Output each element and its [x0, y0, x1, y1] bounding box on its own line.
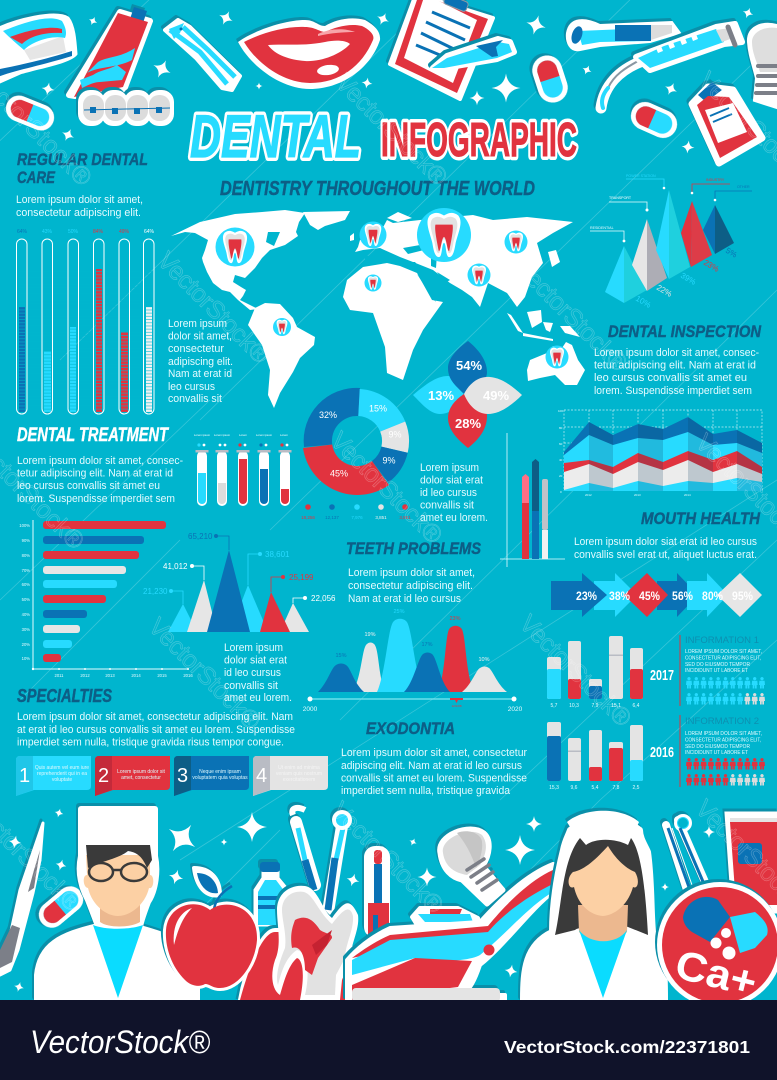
chart: triangles: 22,056: [311, 594, 336, 603]
chart: cylinders 2017: 7,9: [592, 703, 599, 709]
icon: calcium badge: [657, 882, 777, 1008]
panel: information 2: INCIDIDUNT UT LABORE ET: [685, 750, 748, 756]
chart: cylinders 2017: 5,7: [551, 703, 558, 709]
chart: level tubes: 64%: [144, 229, 155, 235]
chart: donut: 32%: [319, 410, 337, 420]
chart: pyramids: OTHER: [737, 185, 750, 189]
chart: donut: 9%: [382, 456, 396, 466]
text block: triangles note: convallis sit: [224, 680, 278, 692]
chart: pyramids: 5%: [724, 246, 739, 260]
chart: bell curves: 25%: [393, 609, 405, 615]
chart: bell curves: 10%: [478, 657, 490, 663]
donut legend: 3,851: [375, 515, 387, 520]
icon: dental implant: [749, 25, 777, 107]
chart: cylinders 2017: [547, 636, 674, 709]
box 3: [174, 756, 249, 796]
text block: exodontia: imperdiet sem nulla, tristique gravida: [341, 785, 511, 797]
heading: REGULAR DENTAL: [17, 150, 148, 169]
text block: exodontia: Lorem ipsum dolor sit amet, consectetur: [341, 747, 527, 759]
icon: clipboard: [390, 0, 493, 99]
text block: dental inspection: [594, 347, 759, 397]
text block: triangles note: amet eu lorem.: [224, 692, 292, 704]
text block: mouth health: convallis svel erat ut, aliquet luctus erat.: [574, 549, 757, 561]
text block: map note: adipiscing elit.: [168, 356, 233, 368]
chart: level tubes: 64%: [17, 229, 28, 235]
chart: arrow percentages: 23%: [576, 589, 597, 603]
chart: pyramids: INDUSTRY: [706, 178, 725, 182]
chart: arrow percentages: 95%: [732, 589, 753, 603]
text block: specialties: Lorem ipsum dolor sit amet, consectetur adipiscing elit. Nam: [17, 711, 293, 723]
heading: dental treatment: DENTAL TREATMENT: [17, 425, 169, 446]
panel: information 2: INFORMATION 2: [685, 716, 759, 727]
title: INFOGRAPHIC: [381, 114, 577, 167]
chart: bell curves: 23%: [449, 616, 461, 622]
panel: information 1: INCIDIDUNT UT LABORE ET: [685, 668, 748, 674]
chart: cylinders 2016: [547, 722, 674, 791]
panel: information 2: LOREM IPSUM DOLOR SIT AMET,: [685, 731, 762, 737]
text block: petals note: id leo cursus: [420, 487, 477, 499]
text block: dental inspection: Lorem ipsum dolor sit amet, consec-: [594, 347, 759, 359]
text block: petals note: convallis sit: [420, 500, 474, 512]
text block: map note: [168, 318, 233, 405]
chart: horizontal bars: 60%: [22, 582, 30, 587]
icon: pen: [432, 39, 514, 68]
chart: triangles: 21,230: [143, 587, 168, 596]
text block: specialties: [17, 711, 295, 748]
chart: layered area: 2012: [585, 493, 592, 497]
chart: horizontal bars: 30%: [22, 627, 30, 632]
text block: mouth health: [574, 536, 757, 561]
icon: forceps: [165, 20, 240, 90]
box 3: voluptatem quia voluptas: [192, 775, 248, 781]
chart: horizontal bars: 20%: [22, 642, 30, 647]
chart: horizontal bars: 50%: [22, 597, 30, 602]
text block: dental treatment: lorem. Suspendisse imperdiet sem: [17, 493, 175, 505]
donut legend: 12,137: [325, 515, 339, 520]
subtitle: DENTISTRY THROUGHOUT THE WORLD: [220, 178, 535, 200]
chart: arrow percentages: 38%: [609, 589, 630, 603]
icon: dental probes: [292, 808, 352, 912]
infographic canvas: VectorStock®: [514, 609, 637, 733]
chart: grouped vertical bars: [500, 433, 565, 567]
box 1: [16, 756, 91, 796]
chart: arrow percentages: 80%: [702, 589, 723, 603]
chart: cylinders 2016: 2016: [650, 744, 674, 761]
icon: dental handpiece: [567, 20, 680, 50]
panel: information 1: LOREM IPSUM DOLOR SIT AMET,: [685, 649, 762, 655]
footer brand logo: VectorStock®: [30, 1024, 210, 1060]
title: DENTAL: [190, 103, 361, 170]
icon: toothbrush: [0, 15, 76, 84]
infographic canvas: VectorStock®: [326, 796, 449, 920]
chart: donut: 15%: [369, 404, 387, 414]
heading: exodontia: EXODONTIA: [366, 719, 455, 738]
box 2: amet, consectetur: [121, 775, 161, 781]
footer image id: VectorStock.com/22371801: [504, 1037, 750, 1057]
infographic canvas: VectorStock®: [143, 612, 266, 736]
text block: specialties: imperdiet sem nulla, tristique gravida risus tempor congue.: [17, 736, 284, 748]
chart: cylinders 2016: 9,6: [571, 785, 578, 791]
icon: capsule: [2, 92, 58, 134]
chart: cylinders 2016: 15,3: [549, 785, 559, 791]
text block: specialties: at erat id leo cursus convallis sit amet eu lorem. Suspendisse: [17, 724, 295, 736]
chart: horizontal bars: 70%: [22, 568, 30, 573]
text block: triangles note: id leo cursus: [224, 667, 281, 679]
panel: regular dental care: [16, 150, 155, 414]
chart: bell curves: 19%: [364, 632, 376, 638]
panel: information 1: INFORMATION 1: [685, 635, 759, 646]
text block: dental inspection: tetur adipiscing elit. Nam at erat id: [594, 360, 756, 372]
panel: information 1: CONSECTETUR ADIPISCING ELIT,: [685, 656, 761, 662]
icon: medicine bottle: [692, 82, 762, 163]
chart: pyramids: POWER STATION: [626, 174, 656, 178]
chart: horizontal bars: 2016: [183, 673, 193, 678]
chart: layered area: [558, 409, 762, 497]
chart: donut: 45%: [330, 468, 348, 478]
chart: level tubes: [16, 229, 155, 414]
text block: dental treatment: tetur adipiscing elit. Nam at erat id: [17, 468, 173, 480]
text block: petals note: [420, 462, 488, 524]
chart: test tubes: Lorem ipsum: [256, 433, 273, 437]
icon: gums and tooth: [240, 886, 358, 1000]
heading: mouth health: MOUTH HEALTH: [641, 509, 761, 528]
chart: triangles: 38,601: [265, 550, 290, 559]
footer bar: [0, 1000, 777, 1080]
chart: horizontal bars: 2013: [105, 673, 115, 678]
text block: [16, 194, 143, 219]
donut legend: 7,976: [351, 515, 363, 520]
map tooth markers: [216, 208, 568, 368]
chart: test tubes: Lorem: [280, 433, 289, 437]
text block: triangles note: [224, 642, 292, 704]
chart: horizontal bars: 90%: [22, 538, 30, 543]
specialties boxes: [16, 756, 328, 796]
icon: apple: [166, 868, 257, 988]
panel: information 2: [680, 715, 765, 787]
text block: map note: dolor sit amet,: [168, 330, 232, 342]
box 4: exercitationem: [283, 777, 315, 783]
icon: capsule: [626, 97, 682, 143]
text block: mouth health: Lorem ipsum dolor siat erat id leo cursus: [574, 536, 757, 548]
box 2: [95, 756, 170, 796]
icon: dental chair: [347, 864, 553, 1002]
chart: cylinders 2017: 15,1: [611, 703, 621, 709]
chart: horizontal bars: 2012: [80, 673, 90, 678]
chart: layered area: 0: [560, 490, 562, 494]
text block: teeth problems: [348, 567, 475, 605]
nurse: [523, 811, 665, 1000]
text block: petals note: dolor siat erat: [420, 474, 483, 486]
text block: dental inspection: lorem. Suspendisse imperdiet sem: [594, 385, 752, 397]
chart: level tubes: 49%: [119, 229, 130, 235]
chart: level tubes: 84%: [93, 229, 104, 235]
heading: teeth problems: TEETH PROBLEMS: [346, 539, 482, 558]
chart: layered area: 40: [559, 458, 563, 462]
chart: level tubes: 43%: [42, 229, 53, 235]
text block: Lorem ipsum dolor sit amet,: [16, 194, 143, 206]
icon: braces: [78, 90, 174, 126]
chart: petals: 49%: [483, 388, 509, 403]
box 2: Lorem ipsum dolor sit: [117, 769, 166, 775]
chart: bell curves: 15%: [335, 653, 347, 659]
heading: [17, 150, 148, 187]
text block: exodontia: adipiscing elit. Nam at erat id leo cursus: [341, 760, 522, 772]
infographic canvas: VectorStock®: [152, 246, 275, 370]
chart: pyramids: [590, 174, 752, 310]
box 1: reprehenderit qui in ea: [37, 771, 87, 777]
box 3: 3: [177, 765, 188, 787]
chart: triangles: 65,210: [188, 532, 213, 541]
infographic canvas: VectorStock®: [325, 426, 448, 550]
chart: horizontal bars: 10%: [22, 656, 30, 661]
text block: teeth problems: Lorem ipsum dolor sit amet,: [348, 567, 475, 579]
donut legend: 18,256: [301, 515, 315, 520]
box 4: Ut enim ad minima: [278, 765, 320, 771]
text block: triangles note: Lorem ipsum: [224, 642, 283, 654]
text block: map note: leo cursus: [168, 381, 215, 393]
chart: arrow percentages: 45%: [639, 589, 660, 603]
icon: syringe: [0, 823, 43, 975]
chart: petals: 13%: [428, 388, 454, 403]
chart: pyramids: RESIDENTIAL: [590, 226, 614, 230]
chart: bell curves: 17%: [421, 642, 433, 648]
box 4: 4: [256, 765, 267, 787]
box 1: voluptate: [52, 777, 72, 783]
panel: information 2: CONSECTETUR ADIPISCING ELIT,: [685, 738, 761, 744]
text block: petals note: Lorem ipsum: [420, 462, 479, 474]
text block: dental inspection: leo cursus convallis sit amet eu: [594, 372, 747, 384]
icon: electric toothbrush: [364, 846, 390, 939]
icon: lips: [238, 18, 380, 89]
map seas: [266, 232, 450, 302]
text block: exodontia: convallis sit amet eu lorem. Suspendisse: [341, 772, 527, 784]
chart: donut: 9%: [388, 430, 402, 440]
chart: layered area: 2014: [684, 493, 691, 497]
text block: dental treatment: leo cursus convallis sit amet eu: [17, 480, 160, 492]
chart: arrow percentages: 56%: [672, 589, 693, 603]
chart: petals: 54%: [456, 358, 482, 373]
icon: calcium badge: Ca+: [671, 941, 762, 1006]
infographic canvas: VectorStock®: [510, 254, 633, 378]
heading: CARE: [17, 168, 56, 187]
panel: information 1: SED DO EIUSMOD TEMPOR: [685, 662, 750, 668]
icon: scaler tool: [601, 24, 742, 108]
box 2: 2: [98, 765, 109, 787]
text block: petals note: amet eu lorem.: [420, 512, 488, 524]
chart: horizontal bars: [19, 520, 193, 678]
doctor: [37, 809, 197, 1000]
chart: cylinders 2016: 7,8: [613, 785, 620, 791]
chart: horizontal bars: 2011: [54, 673, 64, 678]
chart: petals: 28%: [455, 416, 481, 431]
chart: cylinders 2017: 10,3: [569, 703, 579, 709]
chart: horizontal bars: 40%: [22, 612, 30, 617]
chart: layered area: 20: [559, 474, 563, 478]
box 4: veniam quis nostrum: [276, 771, 322, 777]
chart: cylinders 2016: 5,4: [592, 785, 599, 791]
icon: capsule: [33, 881, 89, 933]
title: INFOGRAPHIC: [381, 114, 577, 167]
chart: test tubes: Lorem: [239, 433, 248, 437]
chart: pyramids: 22%: [655, 283, 673, 299]
chart: pyramids: 10%: [634, 294, 652, 310]
icon: water bottle: [255, 862, 288, 925]
panel: information 1: [680, 635, 765, 706]
box 1: 1: [19, 765, 30, 787]
icon: toothpaste tube: [69, 7, 150, 97]
box 4: [253, 756, 328, 796]
panel: information 2: SED DO EIUSMOD TEMPOR: [685, 744, 750, 750]
chart: cylinders 2016: 2,5: [633, 785, 640, 791]
text block: dental treatment: Lorem ipsum dolor sit amet, consec-: [17, 455, 183, 467]
chart: bell curves: [303, 609, 523, 713]
chart: cylinders 2017: 6,4: [633, 703, 640, 709]
chart: horizontal bars: 100%: [19, 523, 30, 528]
chart: pyramids: 39%: [679, 271, 697, 287]
text block: map note: Nam at erat id: [168, 368, 232, 380]
icon: implant: [440, 829, 503, 904]
chart: layered area: 60: [559, 442, 563, 446]
icon: capsule: [528, 52, 572, 106]
chart: bell curves: 2000: [303, 706, 318, 713]
chart: triangles: 25,199: [289, 573, 314, 582]
title: DENTAL: [190, 103, 361, 170]
text block: consectetur adipiscing elit.: [16, 207, 141, 219]
text block: teeth problems: consectetur adipiscing elit.: [348, 580, 473, 592]
chart: pyramids: 23%: [702, 258, 720, 274]
text block: teeth problems: Nam at erat id leo cursus: [348, 593, 461, 605]
chart: horizontal bars: 2014: [131, 673, 141, 678]
chart: arrow percentages: [551, 573, 762, 617]
chart: layered area: 80: [559, 426, 563, 430]
box 3: Neque enim ipsam: [199, 769, 241, 775]
text block: triangles note: dolor siat erat: [224, 654, 287, 666]
icon: tube: [726, 813, 777, 912]
text block: map note: consectetur: [168, 343, 224, 355]
text block: exodontia: [341, 747, 527, 797]
box 1: Quis autem vel eum iure: [35, 765, 89, 771]
chart: test tubes: [194, 433, 292, 506]
chart: donut: [303, 388, 409, 495]
chart: test tubes: Lorem ipsum: [214, 433, 231, 437]
infographic canvas: VectorStock®: [330, 68, 453, 192]
world map: [171, 208, 585, 408]
heading: specialties: SPECIALTIES: [17, 686, 112, 706]
chart: cylinders 2017: 2017: [650, 667, 674, 684]
chart: level tubes: 50%: [68, 229, 79, 235]
chart: horizontal bars: 80%: [22, 553, 30, 558]
title: [190, 103, 577, 170]
donut legend: [301, 504, 411, 520]
icon: dental tools: [666, 814, 705, 890]
chart: triangles: [143, 532, 336, 632]
chart: pyramids: TRANSPORT: [609, 196, 632, 200]
chart: petals: [413, 341, 522, 448]
chart: layered area: 2013: [634, 493, 641, 497]
chart: bell curves: 12/1/08: [451, 704, 462, 708]
chart: triangles: 41,012: [163, 562, 188, 571]
text block: map note: Lorem ipsum: [168, 318, 227, 330]
chart: layered area: 100: [558, 409, 563, 413]
donut legend: 3,851: [399, 515, 411, 520]
map continents: [171, 210, 585, 408]
text block: map note: convallis sit: [168, 393, 222, 405]
chart: bell curves: 2020: [508, 706, 523, 713]
chart: horizontal bars: 2015: [157, 673, 167, 678]
chart: test tubes: Lorem ipsum: [194, 433, 211, 437]
text block: dental treatment: [17, 455, 183, 505]
